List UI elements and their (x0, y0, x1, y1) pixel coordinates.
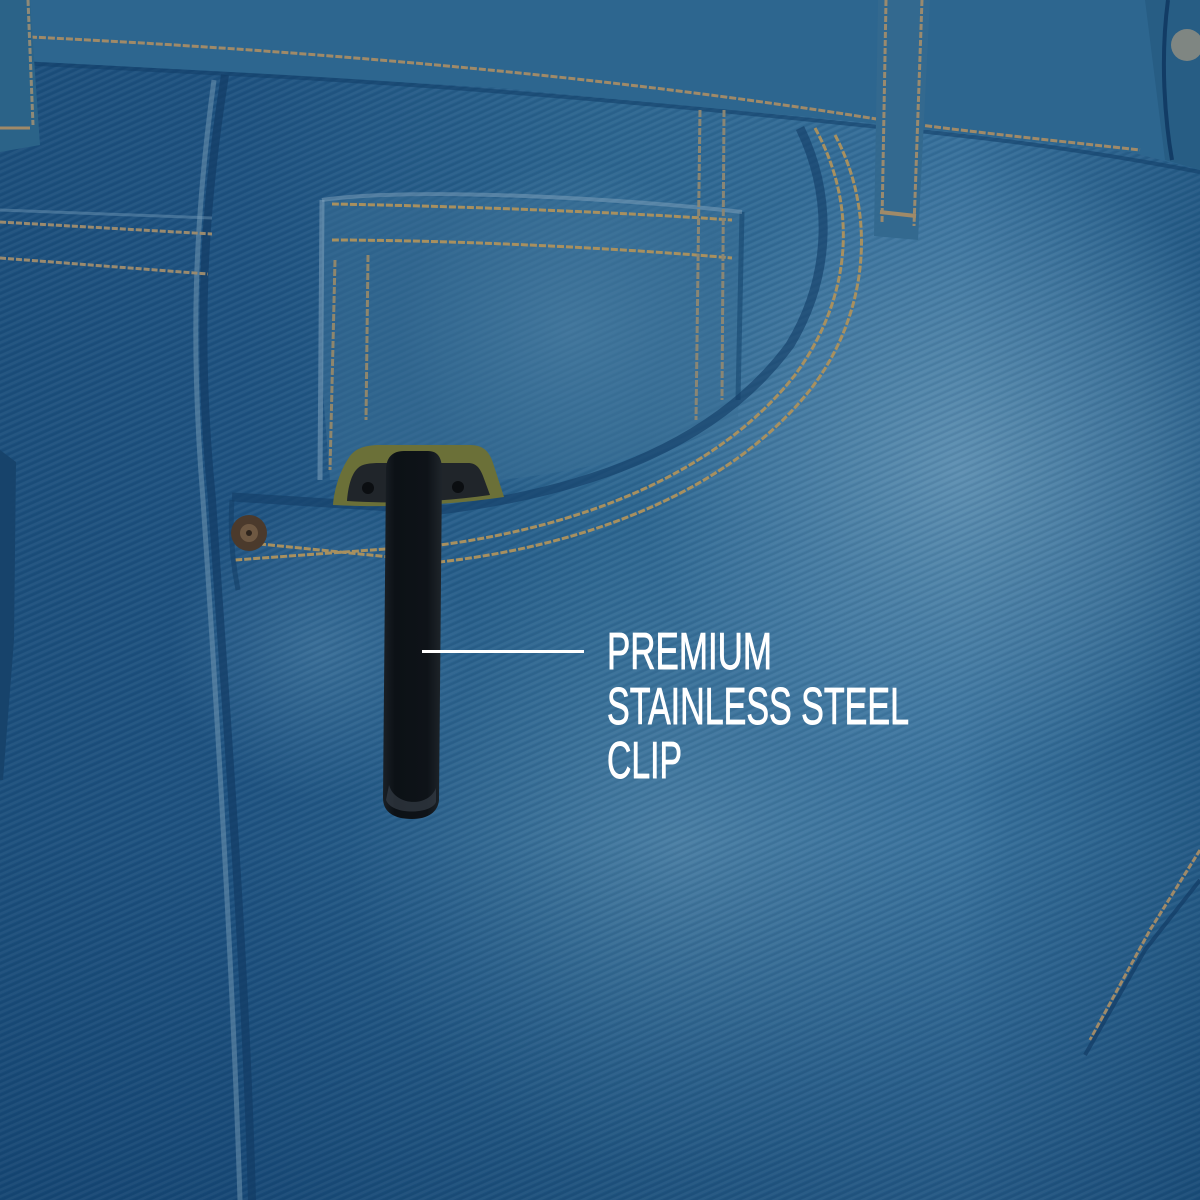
waistband (0, 0, 1200, 172)
knife handle in pocket (333, 445, 504, 506)
callout leader line (422, 650, 584, 653)
coin pocket (320, 110, 742, 480)
belt loop: left (0, 0, 40, 152)
pocket clip (383, 451, 442, 819)
belt loop: right (874, 0, 930, 240)
side seam (196, 75, 252, 1200)
left back pocket stitching (0, 210, 212, 780)
callout label: PREMIUM (607, 623, 772, 681)
rivet (231, 515, 267, 551)
callout label (607, 623, 909, 790)
fly and button edge (1085, 0, 1200, 1055)
callout label: STAINLESS STEEL (607, 678, 909, 736)
callout label: CLIP (607, 732, 682, 790)
front pocket opening curve (231, 128, 861, 590)
